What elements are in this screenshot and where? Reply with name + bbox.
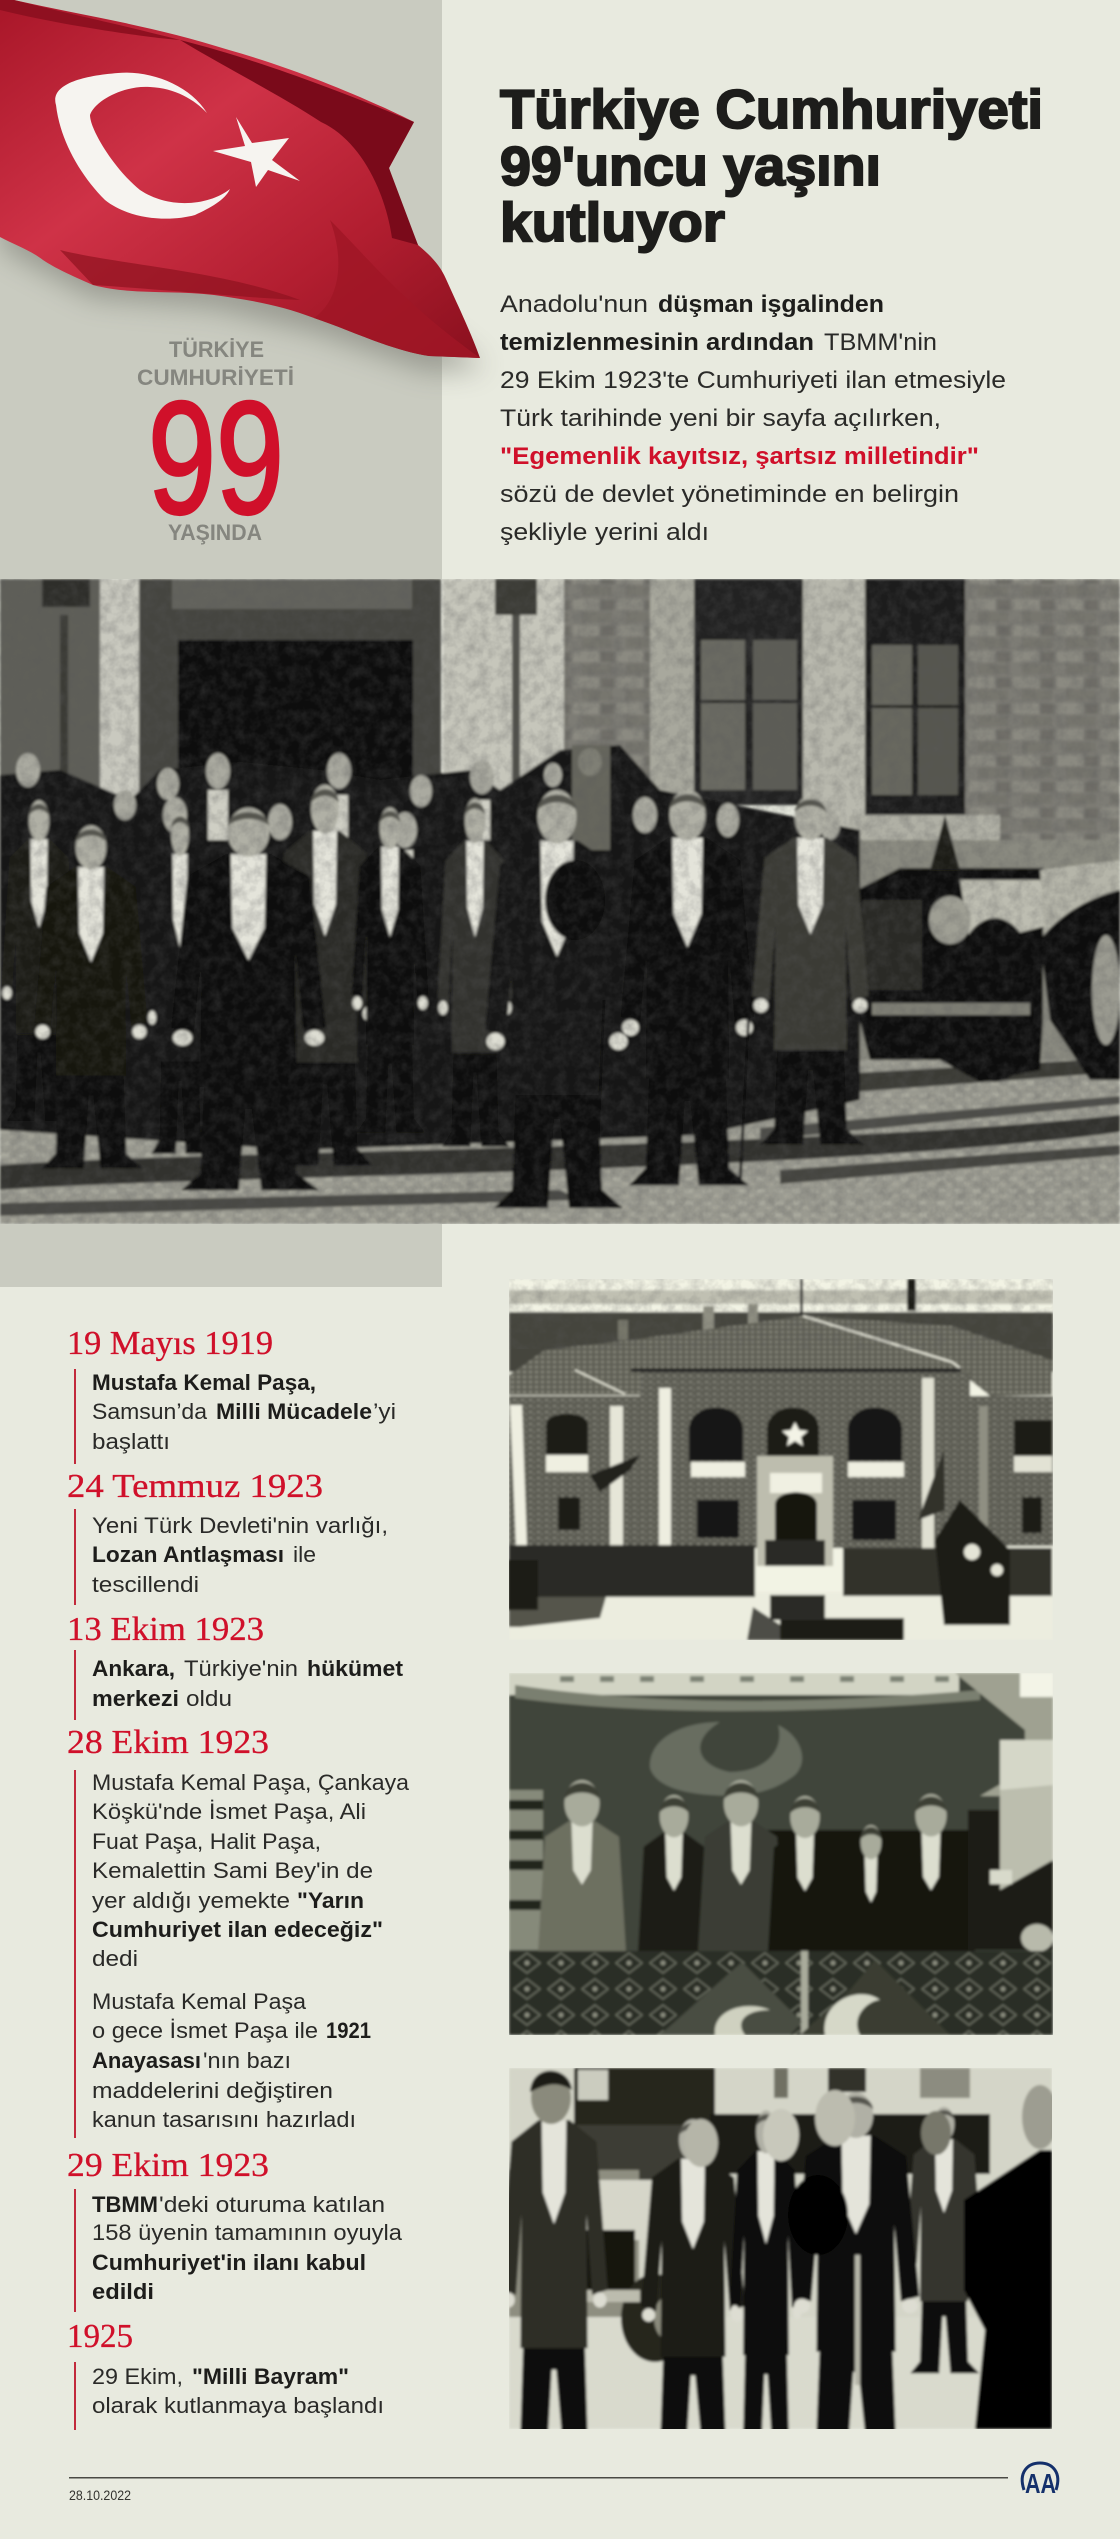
timeline: 24 Temmuz 1923: Lozan Antlaşması: [92, 1542, 284, 1567]
timeline: 13 Ekim 1923: merkezi: [92, 1686, 179, 1711]
timeline: 13 Ekim 1923: oldu: [186, 1686, 232, 1711]
logo: Türkiye Cumhuriyeti 99 yaşında: TÜRKİYE: [169, 337, 264, 362]
timeline: 24 Temmuz 1923: [67, 1468, 388, 1605]
timeline: 24 Temmuz 1923: Yeni Türk Devleti'nin varlığı,: [92, 1513, 388, 1538]
photo: Atatürk walking with İnönü: [500, 2068, 1058, 2449]
timeline: 13 Ekim 1923: Ankara,: [92, 1656, 175, 1681]
timeline: 19 Mayıs 1919: [67, 1325, 396, 1464]
timeline: 29 Ekim 1923: Cumhuriyet'in ilanı kabul: [92, 2250, 366, 2275]
timeline: 28 Ekim 1923: yer aldığı yemekte: [92, 1888, 290, 1913]
timeline: 19 Mayıs 1919: ’yi: [373, 1399, 396, 1424]
timeline: 28 Ekim 1923: [67, 1724, 409, 2138]
car: [857, 868, 1043, 1082]
intro text block: düşman işgalinden: [658, 291, 884, 318]
footer rule: [69, 2477, 1008, 2478]
intro text block: Türk tarihinde yeni bir sayfa açılırken,: [500, 405, 941, 432]
timeline: 19 Mayıs 1919: başlattı: [92, 1429, 170, 1454]
timeline: 28 Ekim 1923: dedi: [92, 1946, 138, 1971]
timeline: 24 Temmuz 1923: tescillendi: [92, 1572, 199, 1597]
title: kutluyor: [500, 191, 725, 253]
timeline: 28 Ekim 1923: Mustafa Kemal Paşa, Çankaya: [92, 1770, 409, 1795]
crowd and flags: [746, 1606, 783, 1640]
timeline: 1925: [67, 2318, 384, 2430]
timeline: 28 Ekim 1923: Köşkü'nde İsmet Paşa, Ali: [92, 1799, 366, 1824]
parked cars: [509, 1545, 755, 1597]
timeline: 13 Ekim 1923: Türkiye'nin: [184, 1656, 298, 1681]
intro text block: 29 Ekim 1923'te Cumhuriyeti ilan etmesiyle: [500, 367, 1006, 394]
timeline: 28 Ekim 1923: 1921: [326, 2018, 371, 2043]
photo: first parliament building: [508, 1279, 1053, 1640]
logo: Türkiye Cumhuriyeti 99 yaşında: [137, 337, 294, 547]
timeline: 29 Ekim 1923: [67, 2147, 403, 2312]
timeline: 29 Ekim 1923: 'deki oturuma katılan: [159, 2192, 385, 2217]
timeline: 28 Ekim 1923: kanun tasarısını hazırladı: [92, 2107, 356, 2132]
intro text block: Anadolu'nun: [500, 291, 648, 318]
timeline: 28 Ekim 1923: Mustafa Kemal Paşa: [92, 1989, 306, 2014]
timeline: 19 Mayıs 1919: Samsun’da: [92, 1399, 207, 1424]
timeline: 24 Temmuz 1923: ile: [293, 1542, 316, 1567]
timeline: 1925: "Milli Bayram": [192, 2364, 349, 2389]
rug: [509, 1951, 1053, 2035]
ground: [509, 1592, 1053, 1640]
timeline: 28 Ekim 1923: o gece İsmet Paşa ile: [92, 2018, 318, 2043]
intro text block: [500, 291, 1006, 546]
timeline: 1925: 1925: [67, 2318, 133, 2355]
figures: [765, 1830, 975, 1951]
intro text block: şekliyle yerini aldı: [500, 519, 709, 546]
timeline: 28 Ekim 1923: Fuat Paşa, Halit Paşa,: [92, 1829, 321, 1854]
intro text block: sözü de devlet yönetiminde en belirgin: [500, 481, 959, 508]
title: [500, 78, 1043, 253]
timeline: 13 Ekim 1923: hükümet: [307, 1656, 404, 1681]
timeline: 1925: olarak kutlanmaya başlandı: [92, 2393, 384, 2418]
intro text block: "Egemenlik kayıtsız, şartsız milletindir": [500, 443, 979, 470]
timeline: 19 Mayıs 1919: 19 Mayıs 1919: [67, 1325, 273, 1362]
foreground figures: [0, 798, 58, 1121]
logo: Türkiye Cumhuriyeti 99 yaşında: CUMHURİYETİ: [137, 365, 294, 390]
timeline: 28 Ekim 1923: maddelerini değiştiren: [92, 2078, 333, 2103]
title: 99'uncu yaşını: [500, 135, 881, 197]
icon: Anadolu Agency logo: AA: [1025, 2468, 1056, 2499]
title: Türkiye Cumhuriyeti: [500, 78, 1043, 140]
panel: grey strip under main photo: [0, 1224, 442, 1287]
timeline: 29 Ekim 1923: edildi: [92, 2279, 154, 2304]
timeline: 19 Mayıs 1919: Milli Mücadele: [216, 1399, 372, 1424]
timeline: 28 Ekim 1923: Anayasası: [92, 2048, 201, 2073]
panel: grey left header: [0, 0, 442, 579]
timeline: 19 Mayıs 1919: Mustafa Kemal Paşa,: [92, 1370, 316, 1395]
logo: Türkiye Cumhuriyeti 99 yaşında: 99: [148, 368, 284, 547]
timeline: 29 Ekim 1923: 29 Ekim 1923: [67, 2147, 269, 2184]
figures: [509, 2118, 609, 2429]
icon: Anadolu Agency logo: [1022, 2463, 1058, 2499]
timeline: 28 Ekim 1923: Cumhuriyet ilan edeceğiz": [92, 1917, 383, 1942]
intro text block: TBMM'nin: [824, 329, 937, 356]
timeline: 24 Temmuz 1923: 24 Temmuz 1923: [67, 1468, 323, 1505]
footer date: 28.10.2022: [69, 2487, 131, 2503]
logo: Türkiye Cumhuriyeti 99 yaşında: YAŞINDA: [168, 520, 262, 545]
timeline: 28 Ekim 1923: Kemalettin Sami Bey'in de: [92, 1858, 373, 1883]
timeline: 28 Ekim 1923: 28 Ekim 1923: [67, 1724, 269, 1761]
background crowd mass: [0, 745, 860, 1150]
timeline: 13 Ekim 1923: [67, 1611, 404, 1720]
timeline: 29 Ekim 1923: 158 üyenin tamamının oyuyla: [92, 2220, 403, 2245]
timeline: 28 Ekim 1923: 'nın bazı: [203, 2048, 291, 2073]
main photo: Atatürk and delegation leaving parliament: [0, 579, 1120, 1224]
intro text block: temizlenmesinin ardından: [500, 329, 814, 356]
columns: [510, 1405, 527, 1546]
timeline: 28 Ekim 1923: "Yarın: [297, 1888, 364, 1913]
timeline: 13 Ekim 1923: 13 Ekim 1923: [67, 1611, 264, 1648]
icon: Turkish flag: [0, 0, 485, 372]
arches: [689, 1408, 743, 1461]
timeline: 29 Ekim 1923: TBMM: [92, 2192, 158, 2217]
photo: officials on the balcony: [509, 1673, 1053, 2035]
timeline: 1925: 29 Ekim,: [92, 2364, 183, 2389]
